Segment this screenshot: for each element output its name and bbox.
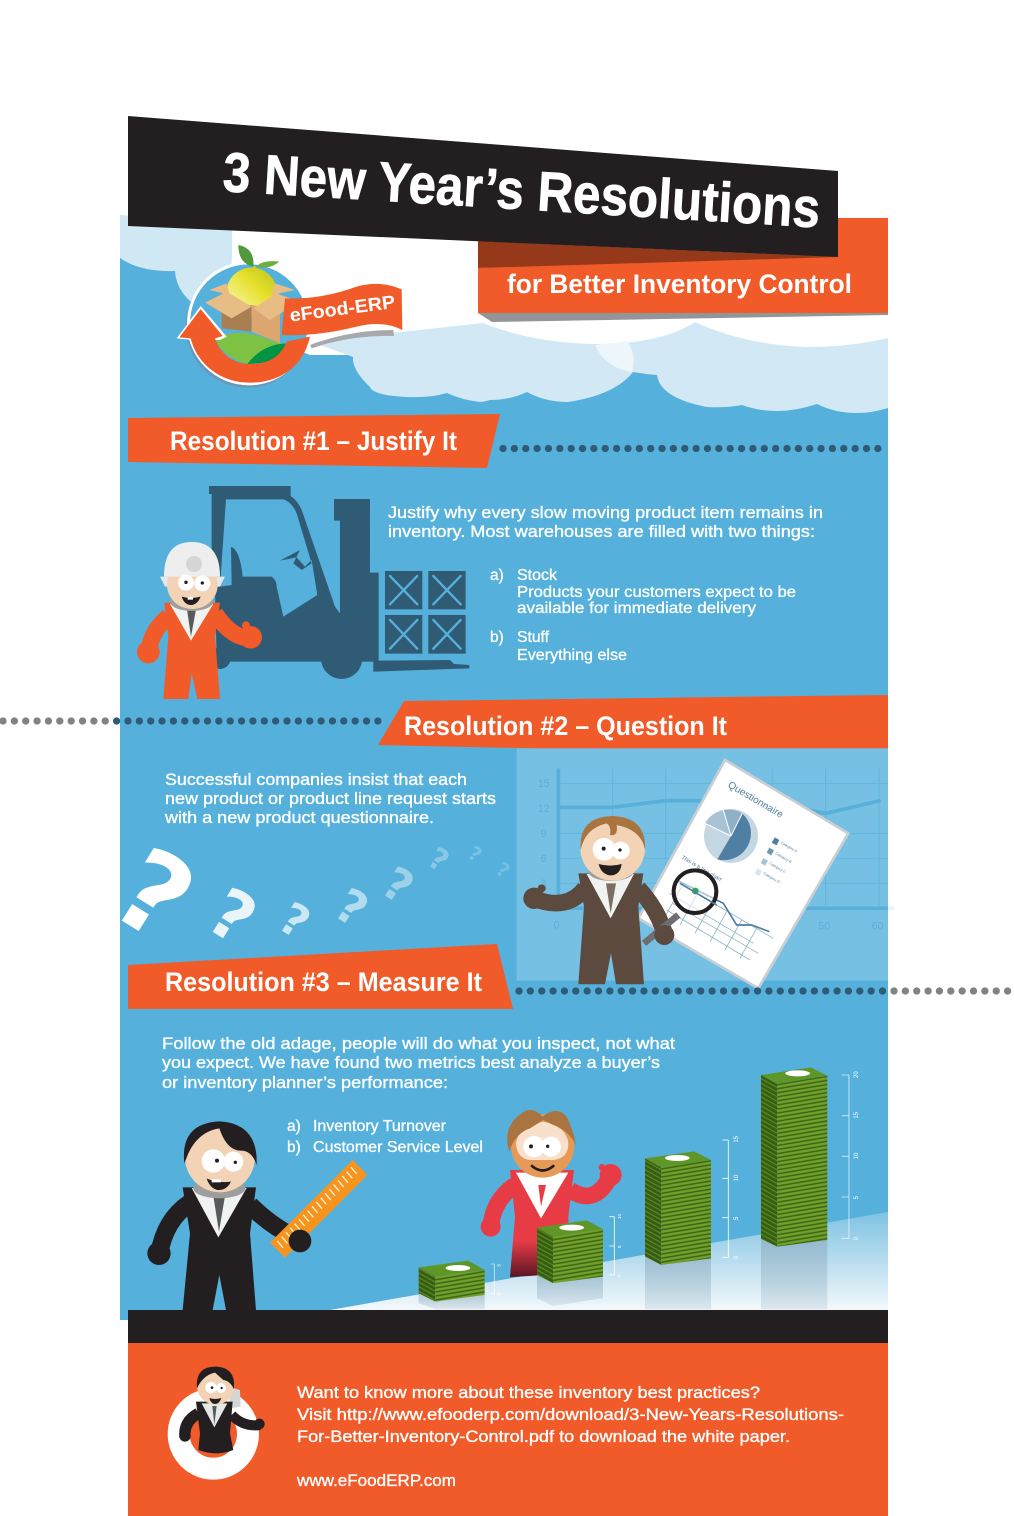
icon: question marks: ?: [373, 856, 423, 915]
chart: background line chart: 6: [541, 853, 547, 865]
text block: stock and stuff list: Stock: [517, 567, 557, 584]
heading: resolution 3: [128, 944, 513, 1009]
stack 3: 10: [734, 1174, 740, 1181]
stack 4: 0: [854, 1236, 860, 1240]
stack 3: 5: [734, 1216, 740, 1220]
stack 4: 5: [854, 1195, 860, 1199]
panel: title bar: [128, 116, 838, 257]
text block: metrics list: Customer Service Level: [313, 1139, 483, 1156]
text block: resolution 3: you expect. We have found two metrics best analyze a buyer’s: [162, 1053, 660, 1072]
heading: resolution 3: Resolution #3 – Measure It: [165, 967, 482, 997]
icon: footer mascot: [179, 1367, 265, 1469]
floor gradient: [330, 1212, 888, 1310]
text block: resolution 1 intro: inventory. Most warehouses are filled with two things:: [388, 522, 815, 541]
chart: background line chart: 50: [818, 920, 830, 932]
text block: resolution 3: or inventory planner’s performance:: [162, 1073, 448, 1092]
subtitle: for Better Inventory Control: [507, 269, 852, 299]
icon: magnifying glass: [644, 870, 717, 943]
character: man in brown suit with magnifier: [523, 816, 717, 984]
heading: resolution 1: [128, 414, 500, 468]
text block: footer call to action: Visit http://www.efooderp.com/download/3-New-Years-Resolutions-: [297, 1405, 844, 1424]
text block: stock and stuff list: [490, 567, 796, 664]
icon: forklift with crates: [209, 486, 469, 679]
stack 3: [645, 1135, 740, 1309]
icon: questionnaire page: Category B: [774, 851, 793, 864]
icon: question marks: ?: [270, 893, 319, 950]
stack 4: 15: [854, 1111, 860, 1119]
chart: background line chart: 3: [541, 878, 547, 890]
text block: stock and stuff list: b): [490, 629, 504, 646]
clouds: [120, 215, 888, 413]
text block: stock and stuff list: Everything else: [517, 647, 627, 664]
text block: resolution 3: Follow the old adage, people will do what you inspect, not what: [162, 1034, 675, 1053]
chart: background line chart: 9: [541, 828, 547, 840]
character: builder in hard hat: [137, 542, 262, 699]
text block: footer call to action: [296, 1383, 844, 1490]
footer: black band: [128, 1310, 888, 1343]
text block: resolution 3: [162, 1034, 675, 1092]
text block: stock and stuff list: a): [490, 567, 504, 584]
icon: questionnaire page: Category D: [762, 871, 781, 884]
text block: metrics list: [287, 1118, 483, 1156]
stack 2: 10: [617, 1213, 622, 1219]
stack 4: 20: [854, 1071, 860, 1078]
text block: resolution 1 intro: Justify why every slow moving product item remains in: [388, 503, 823, 522]
icon: eFood-ERP logo: [177, 245, 402, 388]
text block: metrics list: b): [287, 1139, 301, 1156]
icon: question marks: ?: [194, 873, 269, 961]
title: 3 New Year’s Resolutions: [221, 140, 822, 239]
text block: resolution 2: [164, 770, 496, 827]
icon: questionnaire page: Category A: [780, 841, 798, 854]
stack 2: 5: [617, 1245, 622, 1248]
text block: resolution 2: new product or product line request starts: [165, 789, 496, 808]
text block: footer call to action: www.eFoodERP.com: [296, 1471, 456, 1490]
character: man in black suit with ruler: [147, 1121, 367, 1310]
text block: stock and stuff list: available for immediate delivery: [517, 600, 756, 617]
chart: background line chart: 15: [538, 778, 550, 790]
text block: resolution 2: Successful companies insist that each: [165, 770, 467, 789]
stack 2: [537, 1213, 622, 1306]
footer: orange panel: [128, 1343, 888, 1516]
stack 1: [419, 1261, 502, 1309]
text block: footer call to action: For-Better-Inventory-Control.pdf to download the white paper.: [297, 1427, 790, 1446]
questionnaire heading: Questionnaire: [726, 780, 785, 821]
panel: subtitle banner: [478, 218, 888, 322]
icon: question marks: ?: [91, 823, 215, 968]
stack 2: 0: [617, 1274, 622, 1277]
chart: money stacks: [419, 1067, 860, 1309]
text block: metrics list: Inventory Turnover: [313, 1118, 446, 1135]
heading: resolution 1: Resolution #1 – Justify It: [170, 426, 457, 456]
panel: blue background: [120, 220, 888, 1320]
stack 4: 10: [854, 1152, 860, 1159]
icon: question marks: ?: [464, 841, 486, 867]
icon: question marks: [91, 823, 514, 968]
text block: resolution 2: with a new product questionnaire.: [164, 808, 434, 827]
icon: questionnaire page: Category C: [768, 861, 787, 874]
text block: metrics list: a): [287, 1118, 301, 1135]
chart: background line chart: 0: [554, 920, 560, 932]
stack 4: [761, 1067, 860, 1309]
stack 1: 5: [497, 1264, 502, 1267]
icon: ruler: [270, 1160, 367, 1258]
text block: stock and stuff list: Stuff: [517, 629, 550, 646]
text block: resolution 1 intro: [388, 503, 823, 541]
stack 3: 15: [734, 1135, 740, 1143]
stack 3: 0: [734, 1255, 740, 1259]
icon: question marks: ?: [325, 878, 377, 939]
dotted line: resolution 3: [519, 987, 1012, 995]
stack 1: 0: [497, 1292, 502, 1295]
chart: background line chart: [517, 748, 894, 981]
chart: background line chart: 60: [872, 920, 884, 932]
logo wordmark: eFood-ERP: [288, 291, 396, 326]
text block: footer call to action: Want to know more about these inventory best practices?: [297, 1383, 760, 1402]
dotted line: resolution 2: [3, 717, 380, 725]
icon: question marks: ?: [422, 841, 455, 880]
icon: questionnaire page: [638, 760, 848, 988]
text block: stock and stuff list: Products your customers expect to be: [517, 584, 796, 601]
icon: question marks: ?: [492, 857, 514, 883]
character: man in red suit: [481, 1110, 622, 1277]
dotted line: resolution 1: [503, 445, 880, 452]
chart: background line chart: 12: [538, 803, 550, 815]
heading: resolution 2: Resolution #2 – Question It: [404, 711, 727, 741]
heading: resolution 2: [378, 695, 888, 756]
icon: questionnaire page: This is a line chart: [680, 855, 723, 883]
